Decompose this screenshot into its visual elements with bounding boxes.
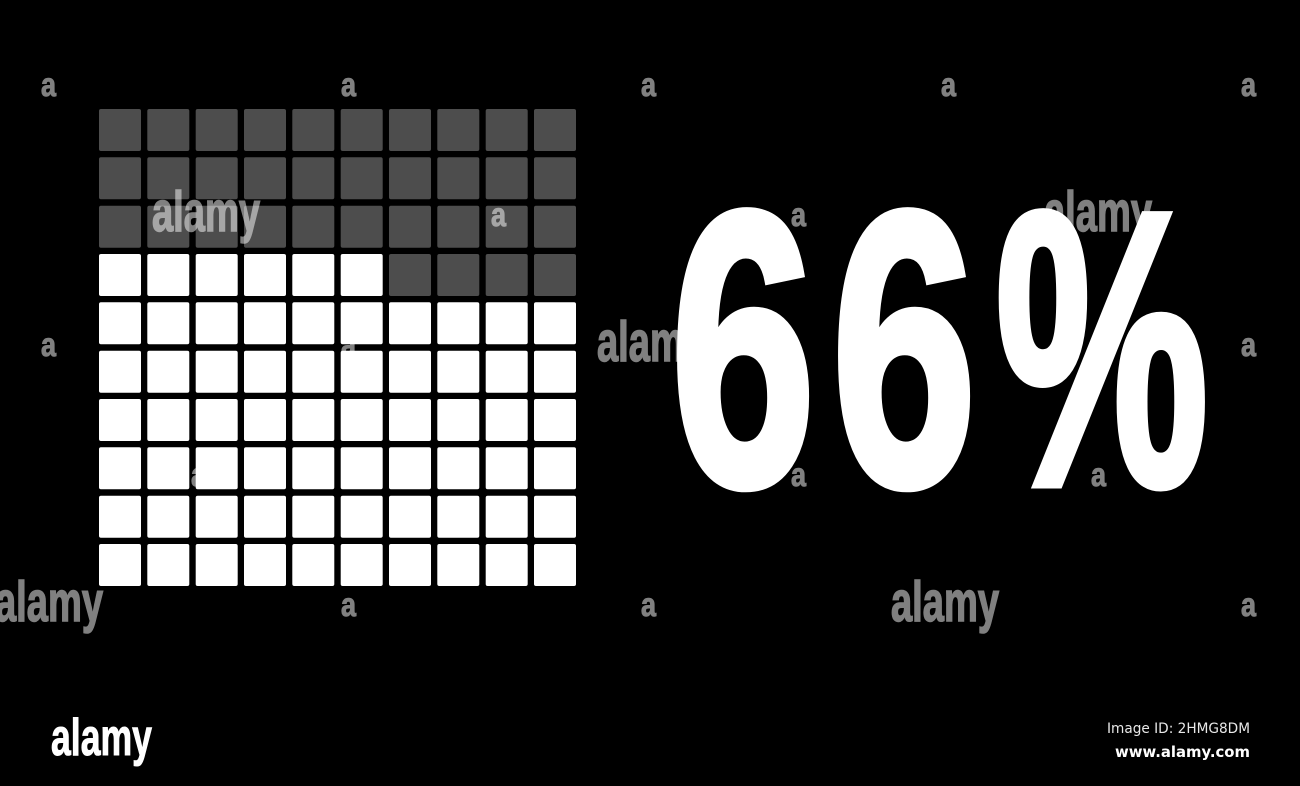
watermarks: large alamy marks [0,180,1152,634]
waffle chart: 66 of 100 squares filled [99,109,576,586]
image id: Image ID: 2HMG8DM [1107,721,1250,737]
big percentage figure [670,131,1208,567]
watermarks: small a marks: a [641,586,657,623]
big percentage figure: 6 [832,131,976,567]
watermarks: small a marks: a [191,456,207,493]
watermarks: large alamy marks: alamy [891,570,999,634]
watermarks: small a marks: a [41,326,57,363]
watermarks: small a marks: a [341,326,357,363]
watermarks: small a marks: a [341,66,357,103]
website url: www.alamy.com [1115,743,1250,761]
watermarks: small a marks [41,66,1257,623]
watermarks: large alamy marks: alamy [597,310,705,374]
watermarks: small a marks: a [1241,66,1257,103]
watermarks: large alamy marks: alamy [1044,180,1152,244]
watermarks: small a marks: a [641,66,657,103]
watermarks: small a marks: a [1241,586,1257,623]
watermarks: large alamy marks: alamy [152,180,260,244]
alamy logo: alamy [51,709,152,767]
watermarks: small a marks: a [1241,326,1257,363]
watermarks: small a marks: a [491,196,507,233]
watermarks: small a marks: a [791,196,807,233]
watermarks: small a marks: a [1091,456,1107,493]
unfilled squares [99,109,576,296]
filled squares [99,254,576,586]
watermarks: small a marks: a [791,456,807,493]
watermarks: small a marks: a [941,66,957,103]
big percentage figure: 6 [670,131,816,567]
watermarks: small a marks: a [341,586,357,623]
watermarks: small a marks: a [41,66,57,103]
